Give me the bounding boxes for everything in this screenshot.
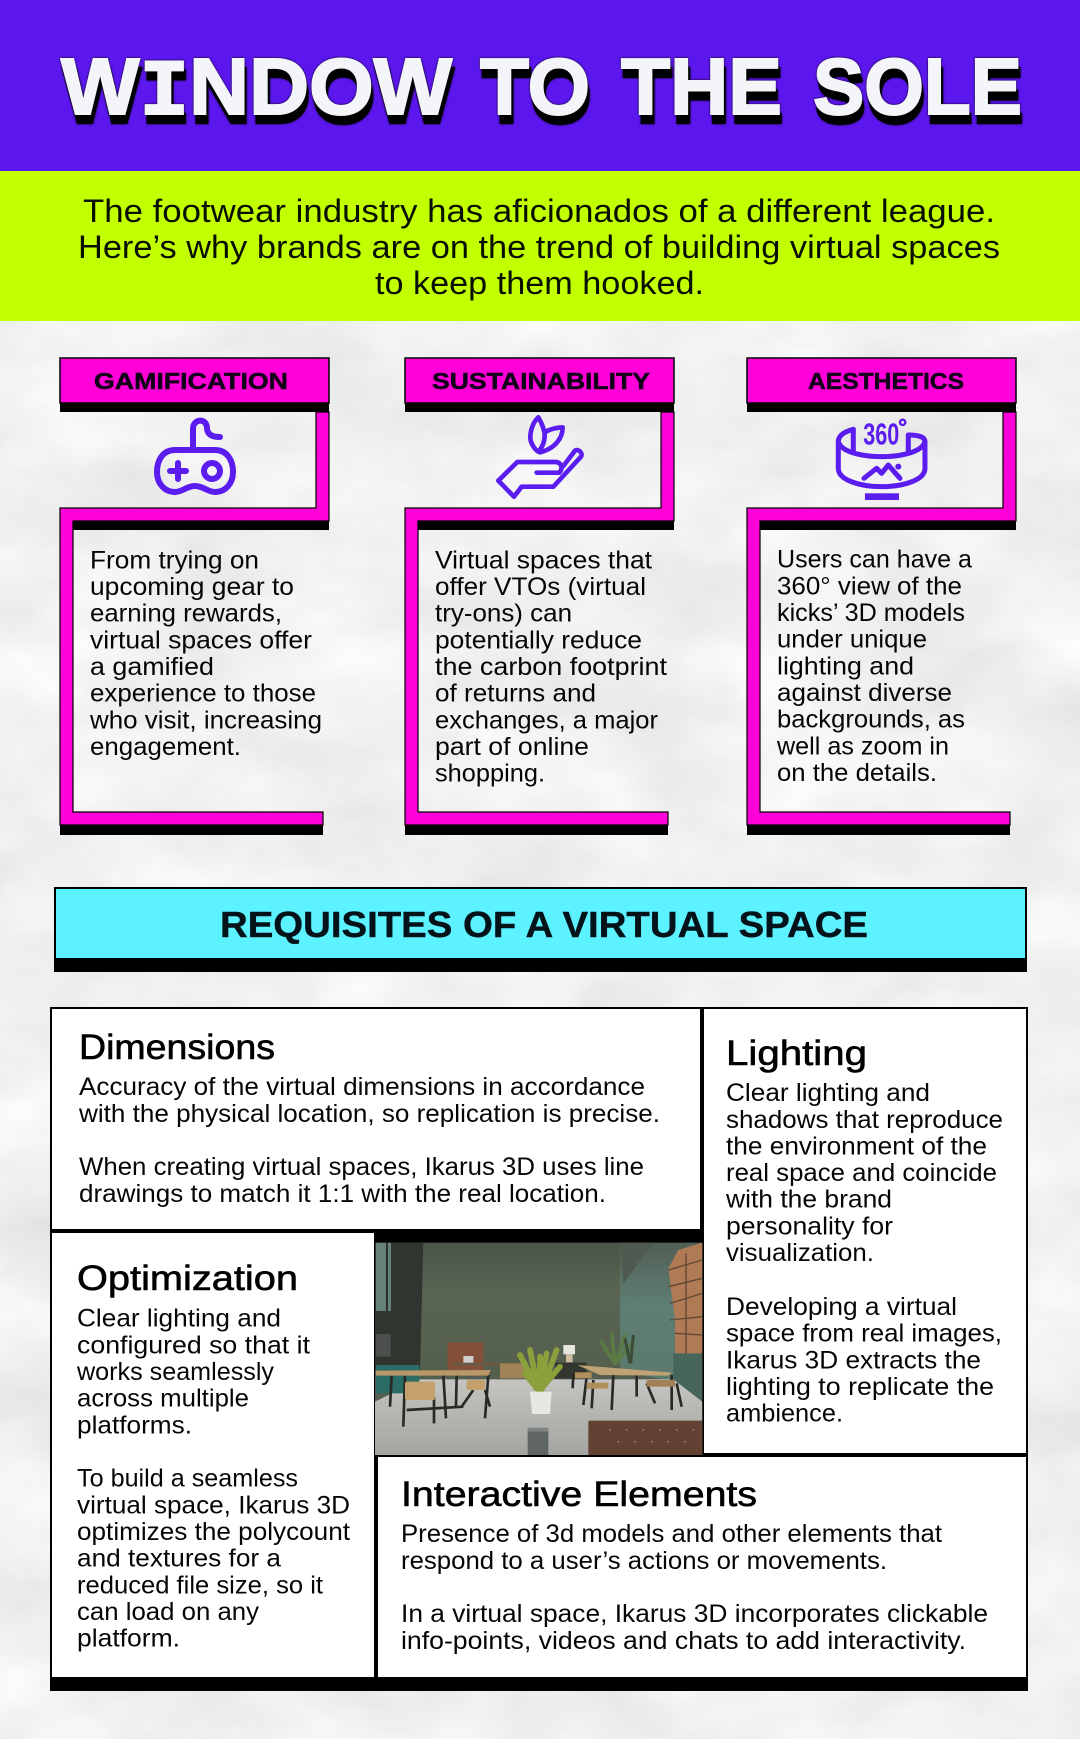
body text: Clear lighting and bbox=[726, 1079, 930, 1107]
body text: space from real images, bbox=[726, 1320, 1002, 1348]
illustration: virtual room bbox=[375, 1243, 703, 1457]
body text: Presence of 3d models and other elements that bbox=[401, 1520, 942, 1548]
body text: real space and coincide bbox=[726, 1159, 997, 1187]
body text: When creating virtual spaces, Ikarus 3D uses line bbox=[79, 1153, 644, 1181]
body text: reduced file size, so it bbox=[77, 1571, 323, 1599]
card frame bbox=[747, 358, 1016, 835]
title bbox=[61, 42, 1022, 139]
body text: experience to those bbox=[90, 680, 316, 708]
body text bbox=[78, 1073, 660, 1208]
heading: GAMIFICATION bbox=[94, 368, 288, 394]
body text: try-ons) can bbox=[435, 600, 572, 628]
body text: on the details. bbox=[777, 759, 937, 787]
body text: info-points, videos and chats to add interactivity. bbox=[401, 1627, 966, 1655]
body text: works seamlessly bbox=[76, 1358, 275, 1386]
icon: 360 view bbox=[838, 417, 925, 500]
title: TO bbox=[480, 42, 590, 131]
body text bbox=[89, 546, 322, 761]
body text: backgrounds, as bbox=[777, 706, 965, 734]
body text bbox=[435, 546, 667, 788]
body text: under unique bbox=[777, 626, 927, 654]
body text: lighting to replicate the bbox=[726, 1373, 994, 1401]
panel: sustainability bbox=[405, 358, 674, 835]
body text: drawings to match it 1:1 with the real location. bbox=[79, 1180, 606, 1208]
requisites grid bbox=[50, 1007, 1028, 1691]
body text: ambience. bbox=[726, 1400, 843, 1428]
body text: platforms. bbox=[77, 1411, 192, 1439]
body text: of returns and bbox=[435, 680, 596, 708]
body text: Accuracy of the virtual dimensions in accordance bbox=[79, 1073, 645, 1101]
body text bbox=[776, 546, 972, 787]
body text: earning rewards, bbox=[90, 600, 282, 628]
panel: gamification bbox=[60, 358, 329, 835]
body text: with the brand bbox=[725, 1186, 892, 1214]
body text bbox=[76, 1305, 350, 1653]
body text: platform. bbox=[77, 1625, 180, 1653]
body text: lighting and bbox=[777, 652, 914, 680]
body text: part of online bbox=[435, 733, 589, 761]
body text: engagement. bbox=[90, 733, 241, 761]
intro strip bbox=[0, 171, 1080, 321]
intro text bbox=[78, 193, 1000, 301]
heading: SUSTAINABILITY bbox=[432, 368, 650, 394]
body text: can load on any bbox=[77, 1598, 260, 1626]
body text: configured so that it bbox=[77, 1331, 310, 1359]
body text: Clear lighting and bbox=[77, 1305, 281, 1333]
body text: Ikarus 3D extracts the bbox=[726, 1346, 981, 1374]
heading: Interactive Elements bbox=[401, 1475, 757, 1514]
body text: respond to a user’s actions or movements. bbox=[401, 1547, 887, 1575]
title banner bbox=[0, 0, 1080, 171]
body text: offer VTOs (virtual bbox=[435, 573, 646, 601]
body text: visualization. bbox=[726, 1239, 874, 1267]
body text: the environment of the bbox=[726, 1132, 987, 1160]
body text: Users can have a bbox=[777, 546, 972, 574]
section banner: requisites bbox=[54, 887, 1027, 972]
body text: virtual spaces offer bbox=[90, 626, 312, 654]
body text: shadows that reproduce bbox=[726, 1106, 1003, 1134]
heading: Lighting bbox=[726, 1034, 867, 1073]
body text: 360° view of the bbox=[777, 572, 962, 600]
icon: hand with leaves bbox=[498, 417, 582, 497]
body text: optimizes the polycount bbox=[77, 1518, 350, 1546]
body text: a gamified bbox=[90, 653, 214, 681]
intro text: Here’s why brands are on the trend of building virtual spaces bbox=[78, 229, 1000, 265]
card frame bbox=[405, 358, 674, 835]
body text: potentially reduce bbox=[435, 626, 642, 654]
body text: Developing a virtual bbox=[726, 1293, 957, 1321]
body text: To build a seamless bbox=[77, 1465, 298, 1493]
body text: and textures for a bbox=[77, 1545, 281, 1573]
body text: In a virtual space, Ikarus 3D incorporates clickable bbox=[401, 1600, 988, 1628]
heading: Dimensions bbox=[79, 1028, 275, 1067]
panel: aesthetics bbox=[747, 358, 1016, 835]
intro text: to keep them hooked. bbox=[375, 265, 704, 301]
icon: 360 view: 360 bbox=[863, 417, 899, 451]
icon: game controller bbox=[157, 421, 233, 492]
panel: interactive elements bbox=[378, 1457, 1026, 1677]
body text: with the physical location, so replication is precise. bbox=[78, 1100, 660, 1128]
title: WINDOW bbox=[61, 42, 453, 139]
body text: kicks’ 3D models bbox=[777, 599, 965, 627]
body text bbox=[401, 1520, 988, 1655]
heading: Optimization bbox=[77, 1259, 298, 1298]
panel: optimization bbox=[52, 1233, 374, 1677]
body text: Virtual spaces that bbox=[435, 546, 652, 574]
body text: well as zoom in bbox=[776, 732, 949, 760]
body text: who visit, increasing bbox=[89, 706, 322, 734]
title: THE bbox=[621, 42, 782, 131]
panel: lighting bbox=[704, 1009, 1026, 1453]
title: SOLE bbox=[813, 42, 1022, 131]
body text: across multiple bbox=[77, 1385, 249, 1413]
section heading: REQUISITES OF A VIRTUAL SPACE bbox=[220, 904, 868, 945]
panel: dimensions bbox=[52, 1009, 700, 1229]
body text: the carbon footprint bbox=[435, 653, 667, 681]
body text: shopping. bbox=[435, 760, 545, 788]
body text bbox=[725, 1079, 1003, 1428]
body text: upcoming gear to bbox=[90, 573, 294, 601]
body text: From trying on bbox=[90, 546, 259, 574]
body text: virtual space, Ikarus 3D bbox=[77, 1491, 350, 1519]
heading: AESTHETICS bbox=[808, 368, 964, 394]
body text: against diverse bbox=[777, 679, 952, 707]
body text: personality for bbox=[726, 1212, 893, 1240]
intro text: The footwear industry has aficionados of a different league. bbox=[83, 193, 995, 229]
card frame bbox=[60, 358, 329, 835]
body text: exchanges, a major bbox=[435, 706, 658, 734]
